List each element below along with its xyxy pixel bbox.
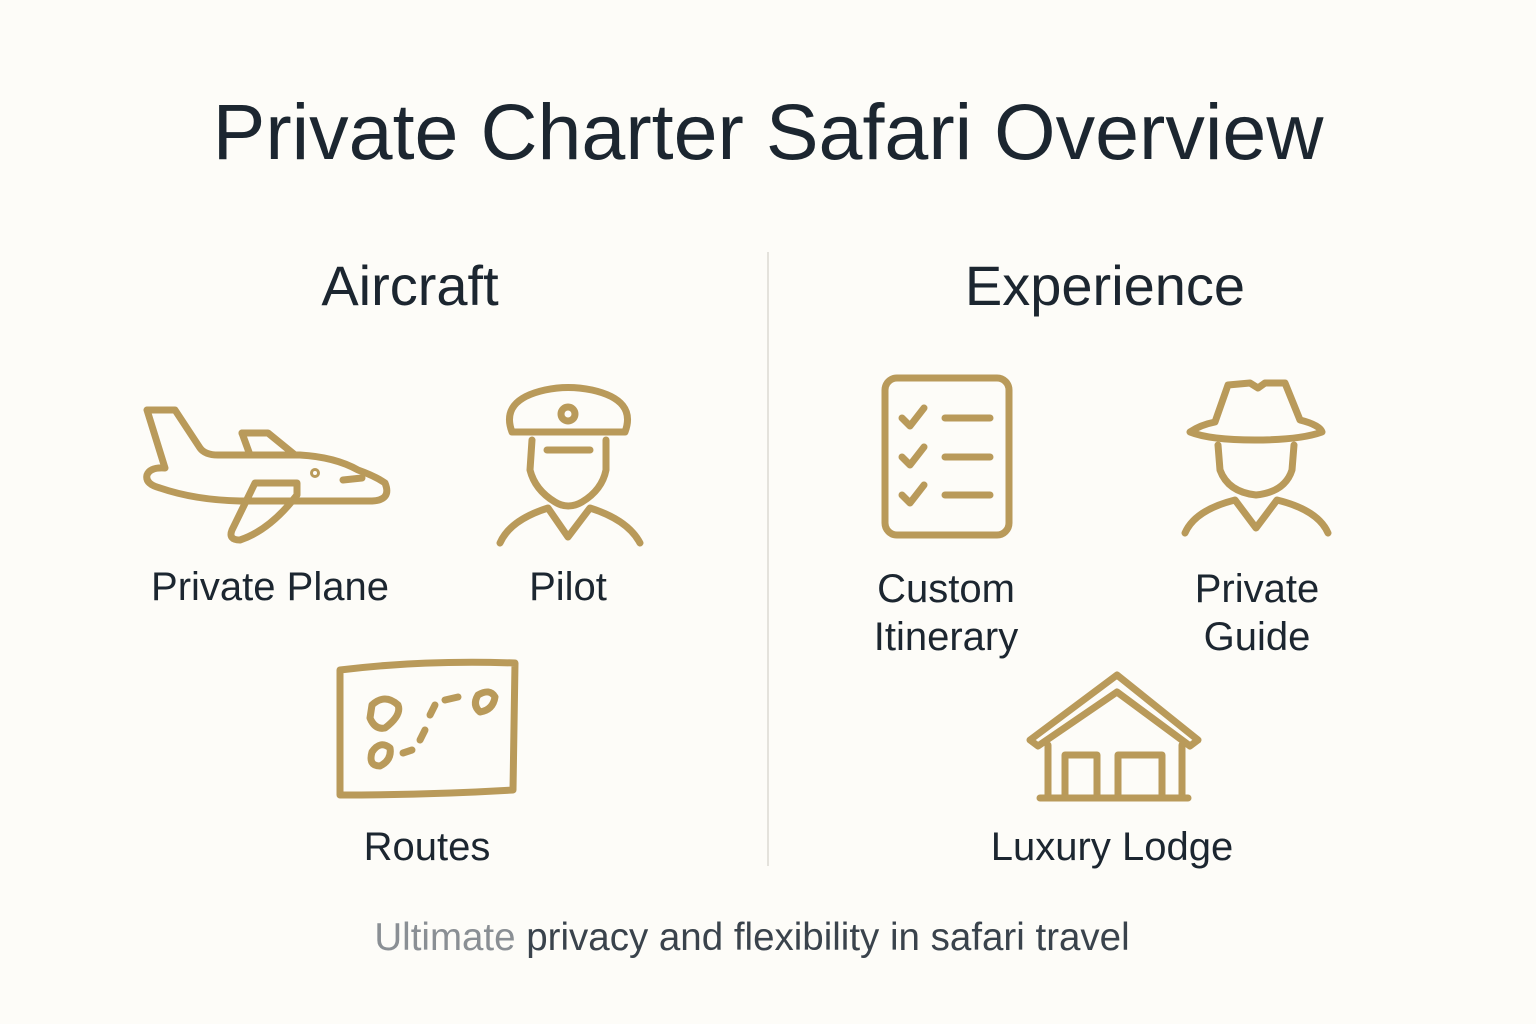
label: Private Guide: Guide (1204, 615, 1310, 659)
heading: Aircraft: Aircraft (321, 254, 499, 317)
footer tagline: Ultimate privacy and flexibility in safari travel (374, 916, 1130, 959)
label: Private Guide: Private (1195, 567, 1319, 611)
divider (767, 252, 769, 866)
label: Custom Itinerary: Itinerary (874, 615, 1018, 659)
title: Private Charter Safari Overview (213, 87, 1323, 176)
label: Private Guide (1195, 567, 1319, 659)
label: Luxury Lodge: Luxury Lodge (991, 825, 1233, 869)
label: Private Plane: Private Plane (151, 565, 389, 609)
label: Routes: Routes (364, 825, 490, 869)
label: Pilot: Pilot (529, 565, 607, 609)
heading: Experience: Experience (965, 254, 1245, 317)
label: Custom Itinerary: Custom (877, 567, 1015, 611)
label: Custom Itinerary (874, 567, 1018, 659)
